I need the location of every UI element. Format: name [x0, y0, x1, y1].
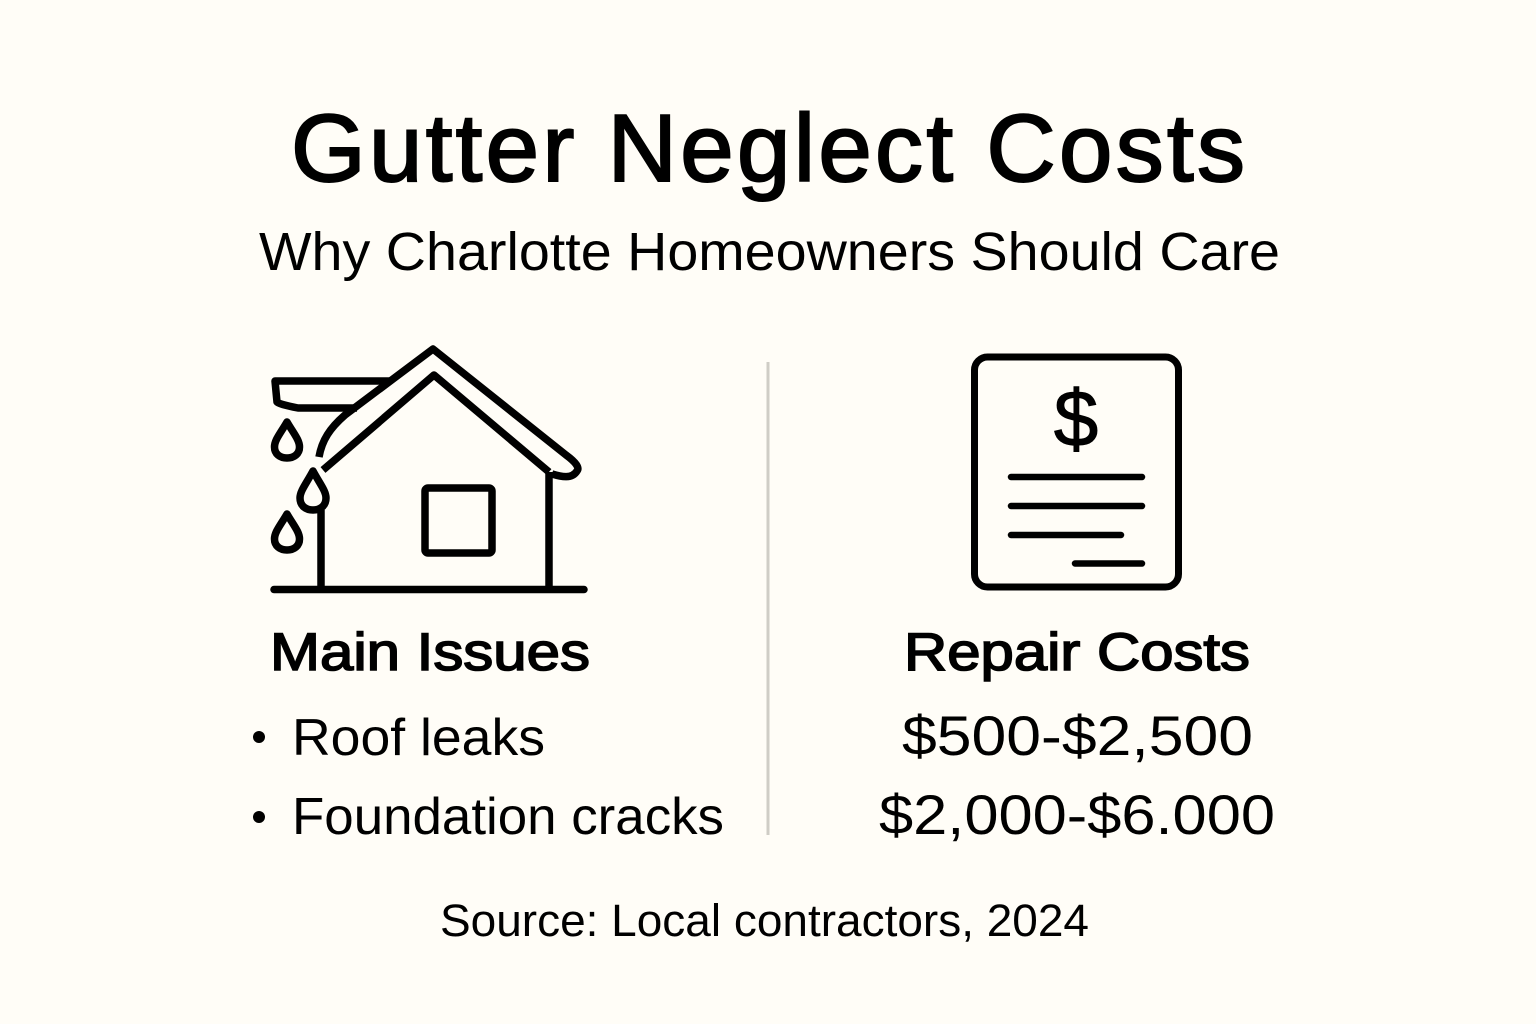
- list: main issues: Foundation cracks: [292, 788, 724, 846]
- title: Gutter Neglect Costs: [291, 95, 1245, 202]
- source note: Source: Local contractors, 2024: [440, 895, 1089, 946]
- list: main issues: Roof leaks: [292, 709, 545, 767]
- icon: invoice with dollar sign: [974, 357, 1178, 587]
- repair cost: foundation cracks: $2,000-$6.000: [879, 783, 1275, 846]
- heading: main issues: Main Issues: [270, 623, 590, 682]
- repair cost: roof leaks: $500-$2,500: [902, 704, 1253, 767]
- icon: invoice with dollar sign: $: [1054, 374, 1098, 463]
- list: main issues: [253, 709, 724, 846]
- heading: repair costs: Repair Costs: [904, 623, 1250, 682]
- icon: house with leaking gutter: [274, 349, 584, 590]
- subtitle: Why Charlotte Homeowners Should Care: [259, 222, 1280, 282]
